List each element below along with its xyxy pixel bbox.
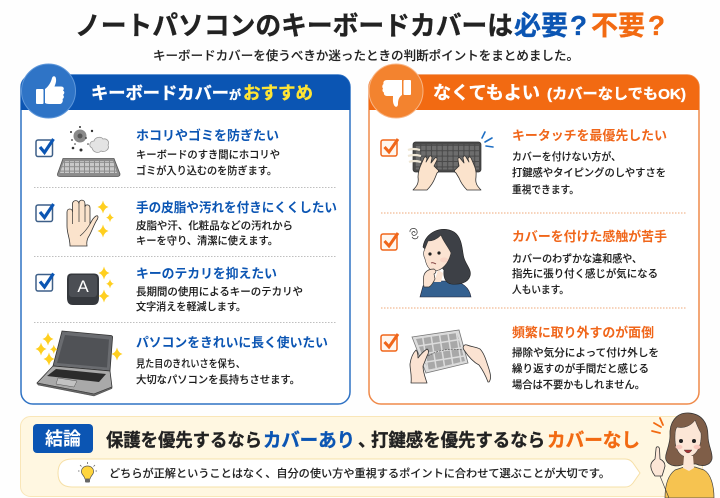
icon: laptop with sparkles (36, 331, 122, 396)
texts: recommended rows: 文字消えを軽減します。 (136, 300, 246, 313)
speech pill: どちらが正解ということはなく、自分の使い方や重視するポイントに合わせて選ぶことが大切です。 (109, 466, 610, 480)
divider (34, 256, 337, 258)
icon: thumbs down (369, 64, 423, 118)
texts: recommended rows: キーボードのすき間にホコリや (136, 149, 280, 161)
icon: woman pointing (651, 413, 714, 498)
texts: not-needed rows: 頻繁に取り外すのが面倒 (512, 325, 654, 340)
texts: recommended rows: ゴミが入り込むのを防ぎます。 (136, 164, 277, 177)
conclusion message: カバーあり (263, 430, 355, 452)
title: ? (648, 10, 665, 41)
texts: recommended rows: 見た目のきれいさを保ち、 (136, 357, 245, 370)
divider (34, 186, 337, 188)
texts: recommended rows: ホコリやゴミを防ぎたい (136, 128, 279, 143)
icon: key cap A: A (77, 277, 89, 296)
texts: not-needed rows: カバーを付けた感触が苦手 (512, 229, 667, 244)
row: laptop (36, 331, 122, 396)
icon: worried woman (410, 228, 471, 297)
conclusion badge (33, 424, 93, 453)
texts: not-needed rows: 場合は不要かもしれません。 (512, 378, 645, 391)
panel heading: recommended (91, 83, 313, 103)
panel header: recommended (21, 75, 350, 110)
texts: not-needed rows: 指先に張り付く感じが気になる (512, 267, 658, 280)
panel heading: not needed: (カバーなしでもOK) (547, 86, 686, 103)
panel: recommended (21, 64, 350, 404)
divider (381, 212, 687, 214)
checkbox (381, 139, 398, 156)
checkbox (381, 334, 398, 351)
row: skin oil (36, 200, 114, 246)
divider (34, 322, 337, 324)
icon: thumbs up (22, 64, 76, 118)
texts: recommended rows: 手の皮脂や汚れを付きにくくしたい (136, 200, 337, 215)
texts: recommended rows (136, 128, 337, 386)
icon: light bulb (78, 462, 97, 482)
texts: not-needed rows: キータッチを最優先したい (512, 128, 667, 143)
row: removal hassle (381, 330, 491, 383)
row: key shine (36, 266, 114, 305)
checkbox (36, 204, 54, 222)
texts: not-needed rows: 人もいます。 (512, 284, 569, 296)
texts: not-needed rows: 重視できます。 (512, 183, 579, 196)
conclusion message: 保護を優先するなら (106, 430, 262, 450)
panel heading: recommended: キーボードカバー (91, 84, 229, 103)
conclusion message (106, 430, 640, 452)
subtitle: キーボードカバーを使うべきか迷ったときの判断ポイントをまとめました。 (153, 48, 579, 63)
icon: hand with sparkles (67, 200, 114, 246)
title: ノートパソコンのキーボードカバーは (75, 11, 513, 41)
texts: not-needed rows: 掃除や気分によって付け外しを (512, 346, 659, 359)
row: key touch (381, 132, 493, 190)
title: ? (570, 10, 587, 41)
row: dust (36, 126, 120, 176)
texts: not-needed rows: 打鍵感やタイピングのしやすさを (512, 166, 666, 179)
conclusion badge: 結論 (45, 429, 81, 449)
texts: recommended rows: 大切なパソコンを長持ちさせます。 (136, 373, 300, 386)
conclusion message: 打鍵感を優先するなら (371, 430, 545, 450)
panel: not needed (369, 64, 699, 404)
panel heading: recommended: が (229, 87, 241, 102)
texts: recommended rows: 皮脂や汗、化粧品などの汚れから (136, 219, 293, 232)
checkbox (36, 139, 54, 156)
texts: not-needed rows: カバーを付けない方が、 (512, 150, 621, 163)
checkbox (381, 233, 398, 250)
icon: hands peeling cover (410, 330, 491, 383)
checkbox (36, 274, 54, 291)
panel header: not needed (369, 75, 699, 110)
texts: not-needed rows: カバーのわずかな違和感や、 (512, 252, 642, 265)
panel heading: not needed: なくてもよい (433, 83, 540, 103)
texts: not-needed rows: 繰り返すのが手間だと感じる (512, 362, 649, 375)
texts: recommended rows: キーを守り、清潔に使えます。 (136, 234, 278, 247)
texts: not-needed rows (512, 128, 667, 391)
row: cover feel (381, 228, 471, 297)
panel heading: not needed (433, 83, 686, 103)
texts: recommended rows: 長期間の使用によるキーのテカリや (136, 285, 303, 298)
title: 不要 (591, 11, 645, 41)
panel heading: recommended: おすすめ (243, 83, 313, 103)
conclusion message: 、 (358, 430, 376, 450)
icon: hands typing on keyboard (408, 132, 493, 190)
panel: conclusion (20, 413, 714, 498)
texts: recommended rows: キーのテカリを抑えたい (136, 266, 277, 281)
texts: recommended rows: パソコンをきれいに長く使いたい (136, 335, 328, 350)
speech pill (58, 459, 640, 487)
icon: dust and keyboard (57, 126, 120, 176)
conclusion message: カバーなし (547, 430, 640, 452)
title: 必要 (514, 11, 568, 41)
divider (381, 307, 687, 309)
